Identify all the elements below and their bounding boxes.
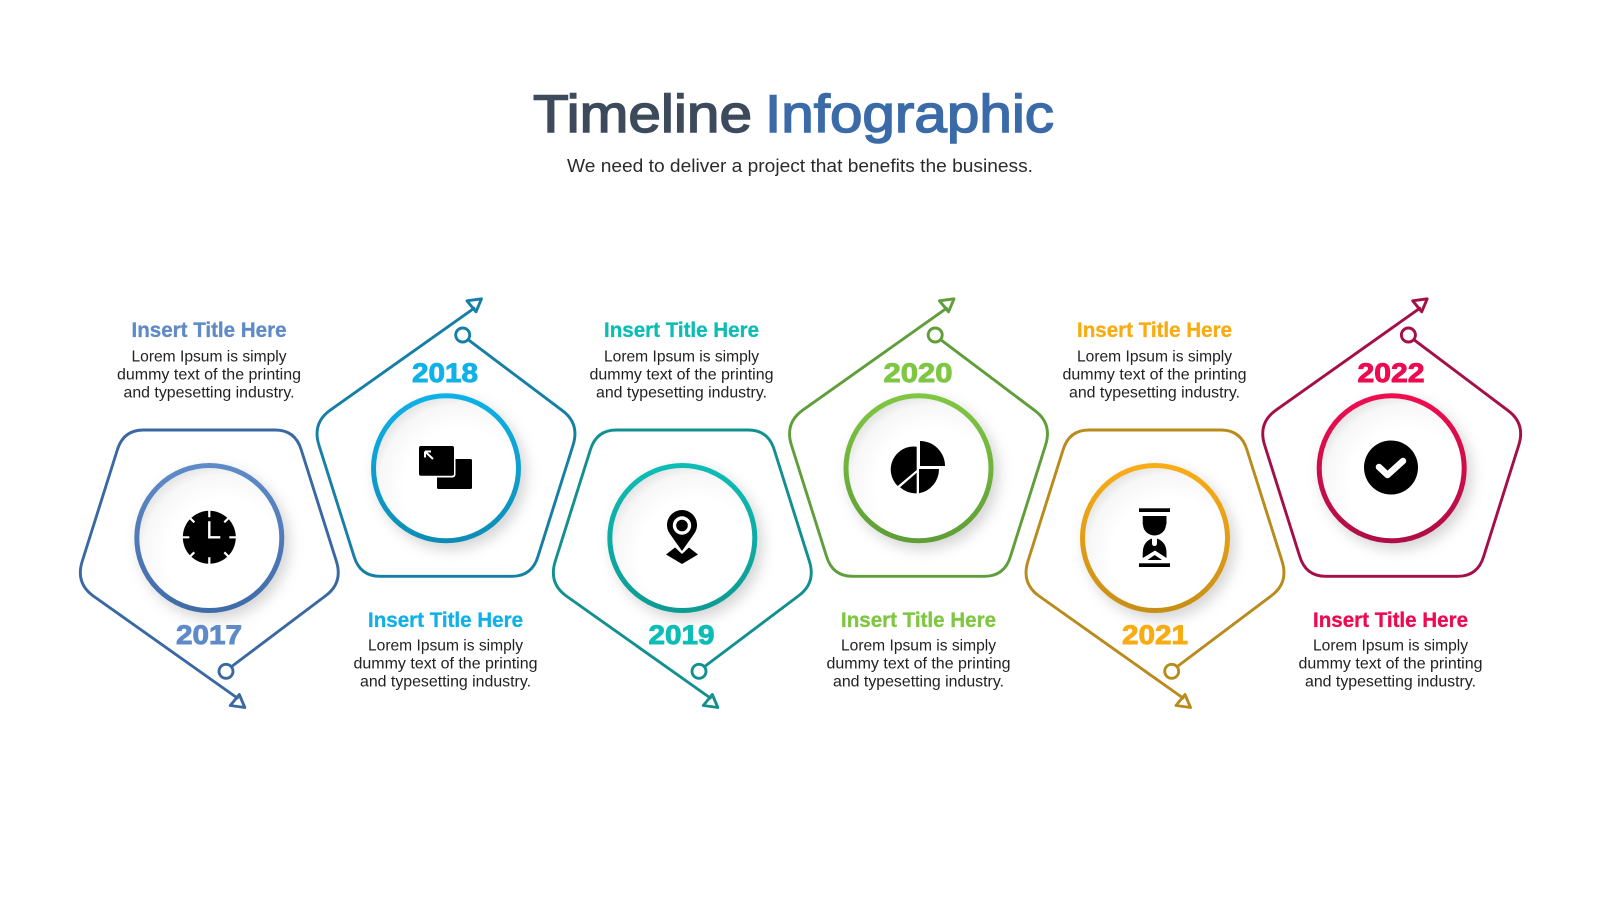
text block 2018: Lorem Ipsum is simply bbox=[368, 638, 523, 654]
text block 2021: Lorem Ipsum is simply bbox=[1077, 348, 1232, 366]
subtitle: We need to deliver a project that benefits the business. bbox=[567, 155, 1033, 176]
text block 2019 bbox=[590, 319, 774, 402]
text block 2019: and typesetting industry. bbox=[596, 384, 767, 402]
text block 2020: Insert Title Here bbox=[841, 609, 996, 632]
title: Timeline bbox=[533, 85, 752, 144]
icon: clock bbox=[182, 510, 236, 564]
icon: map pin bbox=[666, 510, 698, 564]
text block 2018: Insert Title Here bbox=[368, 609, 523, 632]
text block 2020: Lorem Ipsum is simply bbox=[841, 638, 996, 654]
text block 2022: and typesetting industry. bbox=[1305, 674, 1476, 690]
icon: hourglass bbox=[1139, 508, 1170, 567]
text block 2021: Insert Title Here bbox=[1077, 319, 1232, 342]
icon: overlapping squares bbox=[418, 444, 472, 489]
year 2019: 2019 bbox=[648, 620, 714, 650]
text block 2018: dummy text of the printing bbox=[354, 656, 538, 672]
text block 2021 bbox=[1062, 319, 1246, 402]
year 2022: 2022 bbox=[1358, 358, 1424, 388]
panel: 2017 bbox=[80, 319, 338, 708]
pentagon arrow outline 2018 bbox=[317, 299, 575, 576]
text block 2021: dummy text of the printing bbox=[1062, 366, 1246, 384]
title bbox=[533, 85, 1054, 144]
text block 2019: dummy text of the printing bbox=[590, 366, 774, 384]
text block 2018 bbox=[354, 609, 538, 690]
pentagon arrow outline 2017 bbox=[80, 430, 338, 708]
text block 2017: dummy text of the printing bbox=[117, 366, 301, 384]
text block 2018: and typesetting industry. bbox=[360, 674, 531, 690]
pentagon arrow outline 2021 bbox=[1026, 430, 1284, 708]
text block 2022: Lorem Ipsum is simply bbox=[1313, 638, 1468, 654]
text block 2022: dummy text of the printing bbox=[1298, 656, 1482, 672]
pentagon arrow outline 2022 bbox=[1263, 299, 1521, 576]
panel: 2021 bbox=[1026, 319, 1284, 708]
text block 2020 bbox=[826, 609, 1010, 690]
year 2021: 2021 bbox=[1122, 620, 1188, 650]
text block 2021: and typesetting industry. bbox=[1069, 384, 1240, 402]
circle 2018 bbox=[374, 396, 518, 541]
text block 2017: Lorem Ipsum is simply bbox=[132, 348, 286, 366]
text block 2022: Insert Title Here bbox=[1313, 609, 1468, 632]
year 2020: 2020 bbox=[884, 358, 952, 388]
circle 2020 bbox=[846, 396, 991, 541]
icon: pie chart bbox=[891, 441, 945, 493]
circle 2021 bbox=[1082, 466, 1228, 610]
pentagon arrow outline 2019 bbox=[553, 430, 811, 708]
text block 2020: dummy text of the printing bbox=[826, 656, 1010, 672]
text block 2017 bbox=[117, 319, 301, 402]
text block 2017: Insert Title Here bbox=[132, 319, 286, 342]
panel: 2022 bbox=[1263, 299, 1521, 690]
panel: 2018 bbox=[317, 299, 575, 690]
year 2017: 2017 bbox=[176, 620, 242, 650]
year 2018: 2018 bbox=[412, 358, 478, 388]
pentagon arrow outline 2020 bbox=[790, 299, 1047, 576]
title: Infographic bbox=[765, 85, 1054, 144]
circle 2019 bbox=[610, 466, 755, 610]
text block 2019: Insert Title Here bbox=[604, 319, 759, 342]
panel: 2019 bbox=[553, 319, 811, 708]
text block 2017: and typesetting industry. bbox=[124, 384, 294, 402]
panel: 2020 bbox=[790, 299, 1047, 690]
text block 2019: Lorem Ipsum is simply bbox=[604, 348, 759, 366]
circle 2017 bbox=[137, 466, 282, 610]
icon: check mark bbox=[1364, 440, 1418, 494]
text block 2020: and typesetting industry. bbox=[833, 674, 1004, 690]
text block 2022 bbox=[1298, 609, 1482, 690]
circle 2022 bbox=[1319, 396, 1464, 541]
